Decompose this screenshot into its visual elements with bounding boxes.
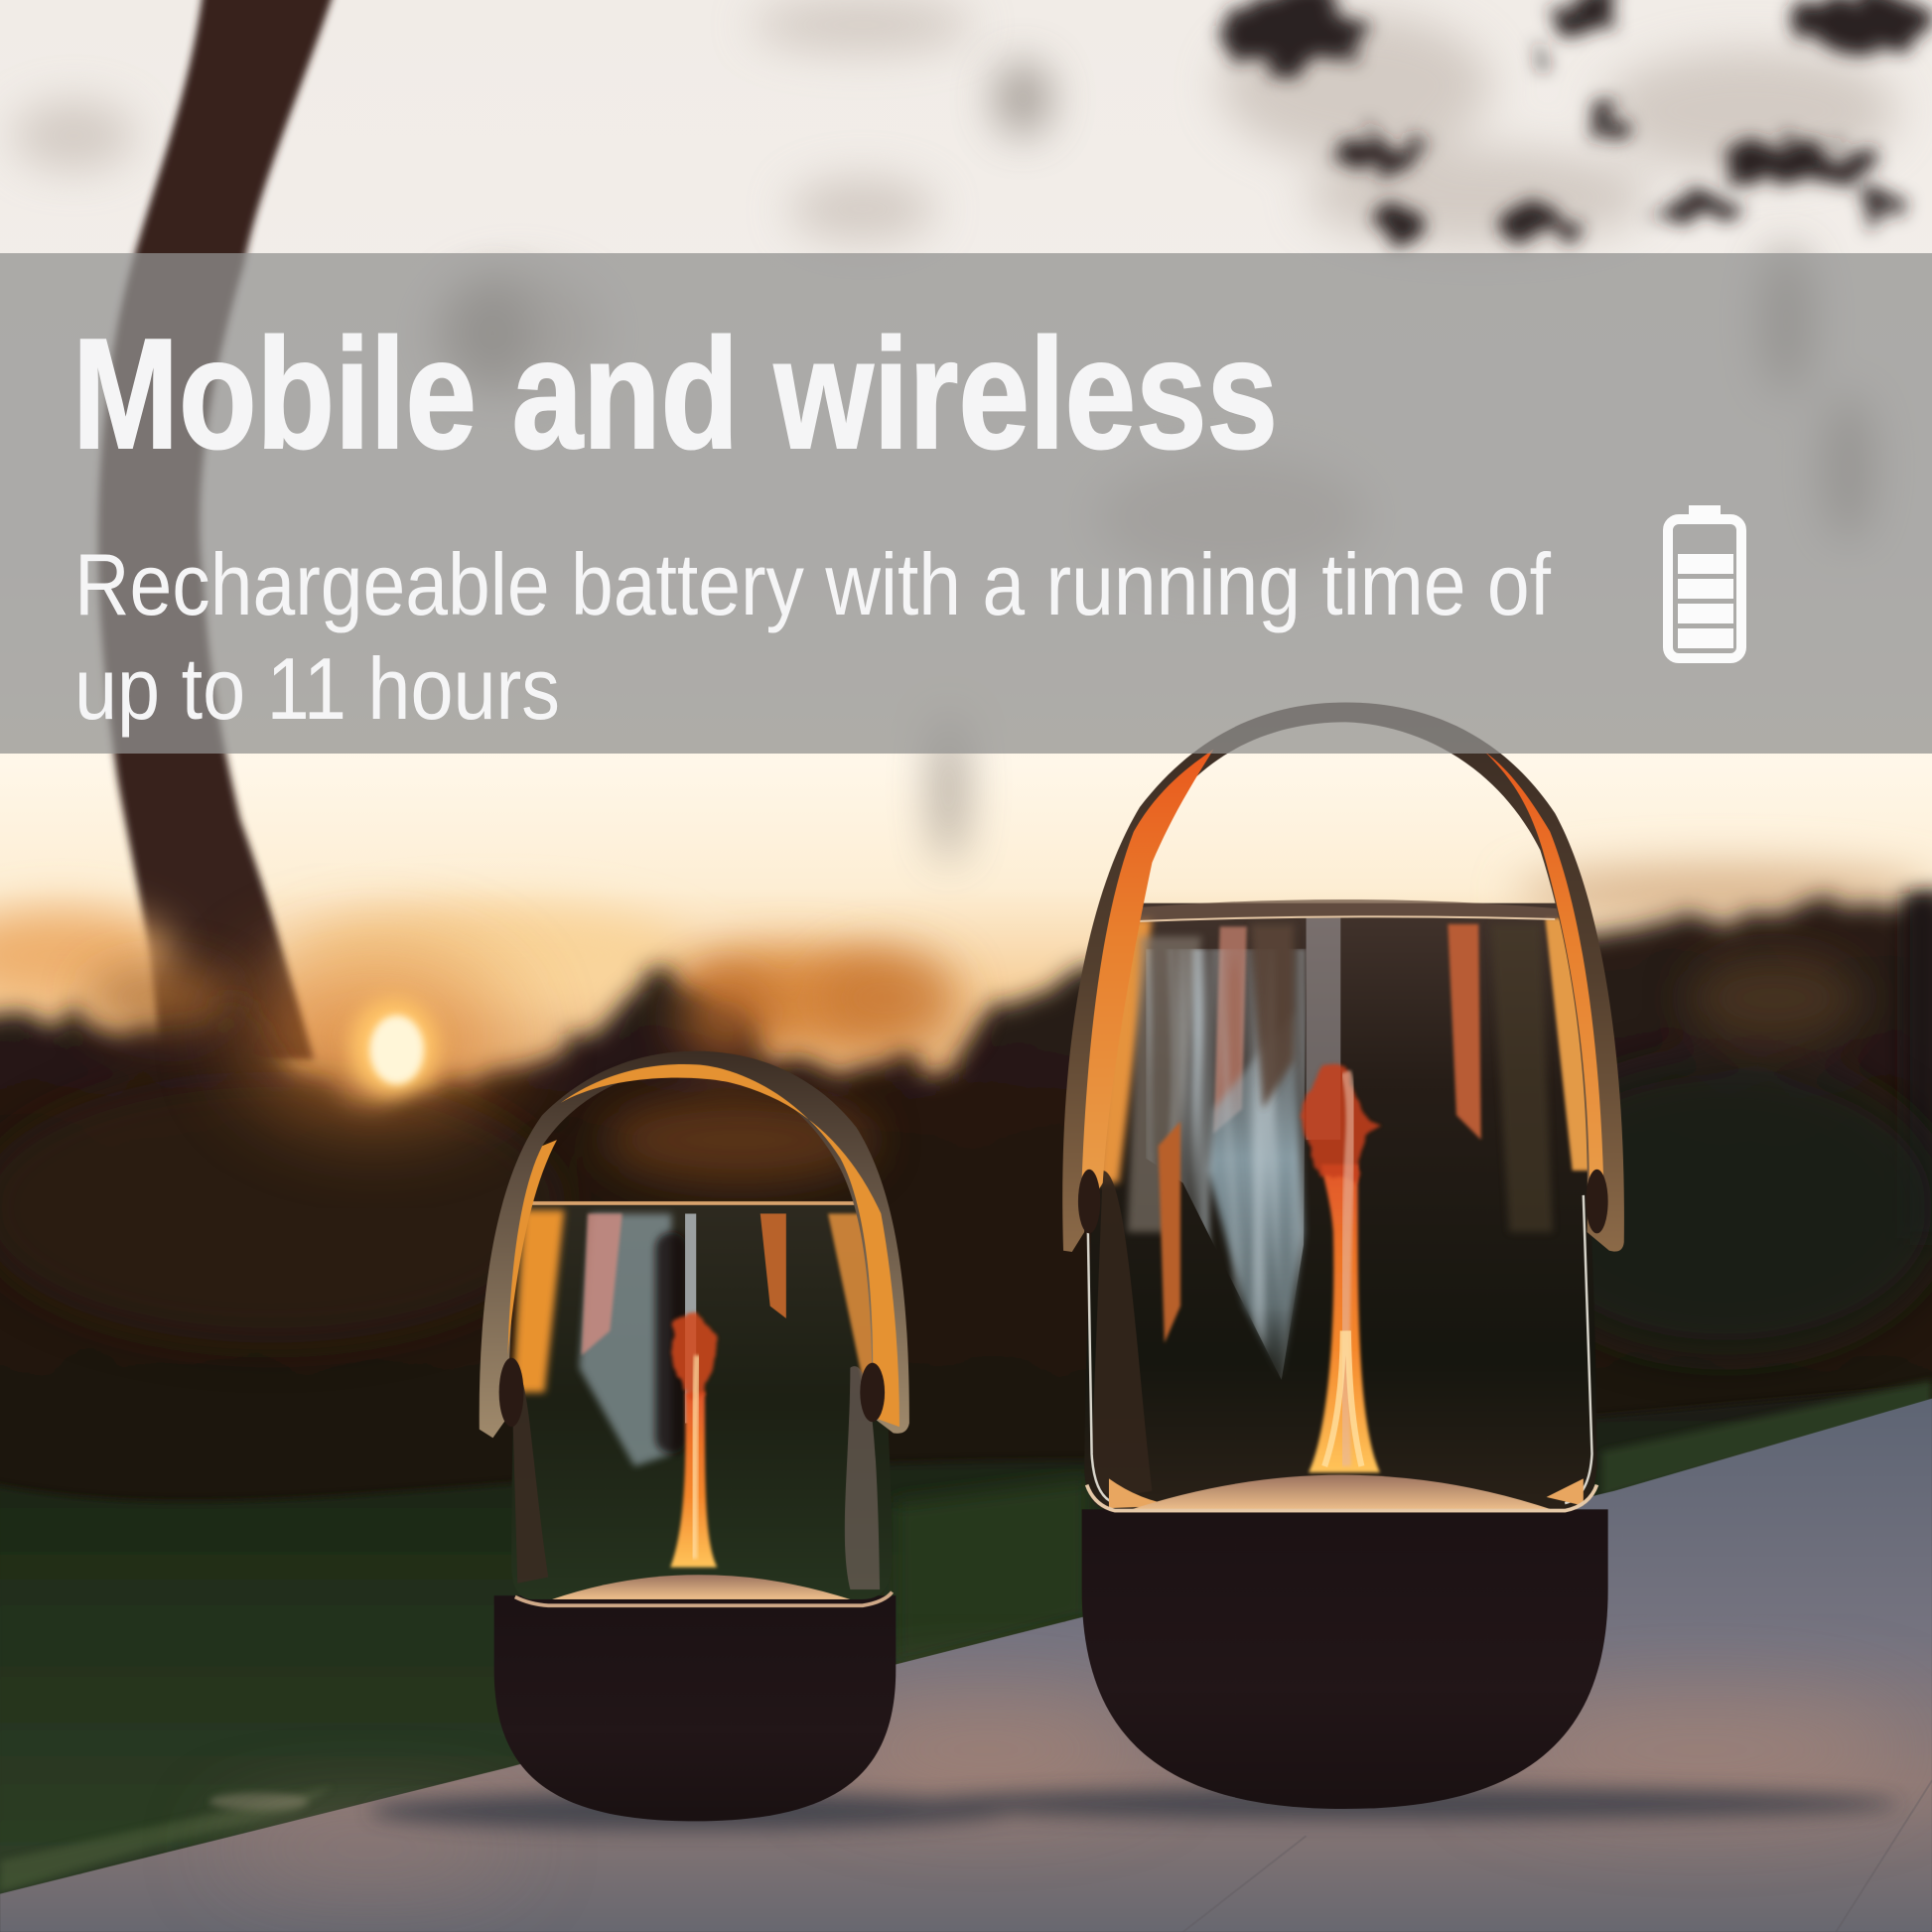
small lamp handle xyxy=(480,1051,909,1438)
large lamp rim line xyxy=(1087,1485,1596,1511)
warm glow behind trees xyxy=(0,866,1932,1047)
pavement warm glow xyxy=(221,1701,1910,1872)
pavement seam xyxy=(1182,1780,1932,1932)
subtitle: Rechargeable battery with a running time of xyxy=(74,535,1551,633)
right side post xyxy=(1903,894,1932,1238)
large lamp handle xyxy=(1062,702,1624,1252)
translucent grey text band xyxy=(0,253,1932,754)
small lamp flame xyxy=(670,1313,717,1568)
lamp shadows on pavement xyxy=(369,1788,1897,1830)
title: Mobile and wireless xyxy=(72,307,1278,482)
small lamp xyxy=(480,1051,909,1821)
large lamp base xyxy=(1082,1509,1608,1809)
large lamp flame xyxy=(1303,1065,1380,1472)
small lamp rim line xyxy=(515,1592,893,1605)
top right dark foliage xyxy=(1222,0,1932,241)
subtitle xyxy=(74,535,1551,738)
large lamp handle glow xyxy=(1080,750,1604,1220)
dark treeline and hedge xyxy=(0,894,1932,1601)
large lamp top rim xyxy=(1116,899,1568,921)
subtitle: up to 11 hours xyxy=(74,639,560,738)
lawn strip between lamps xyxy=(894,1478,1090,1670)
small lamp glass xyxy=(511,1205,893,1599)
icon: battery xyxy=(1668,505,1741,658)
small lamp disc xyxy=(552,1575,850,1599)
large lamp disc xyxy=(1128,1475,1555,1511)
small lamp reflections xyxy=(511,1210,884,1589)
pavement xyxy=(0,1399,1932,1932)
tree trunk xyxy=(98,0,336,1059)
lawn strip right xyxy=(1601,1380,1932,1497)
large lamp reflections xyxy=(1088,918,1598,1508)
large lamp xyxy=(1062,702,1624,1809)
lawn xyxy=(0,1386,1932,1897)
lawn highlights xyxy=(0,1787,333,1891)
large lamp glass xyxy=(1084,903,1596,1511)
setting sun xyxy=(240,949,511,1121)
hedge warm patches xyxy=(0,949,1932,1355)
sky soft grey cloud patches xyxy=(12,0,1897,579)
small lamp top rim xyxy=(520,1201,870,1205)
sky xyxy=(0,0,1932,1232)
small lamp handle pivots xyxy=(499,1358,885,1427)
small lamp handle glow xyxy=(507,1064,899,1427)
small lamp base xyxy=(494,1595,896,1821)
large lamp rim highlight xyxy=(1128,916,1555,921)
tiny grey foliage xyxy=(451,62,1872,863)
large lamp handle pivots xyxy=(1078,1170,1608,1233)
